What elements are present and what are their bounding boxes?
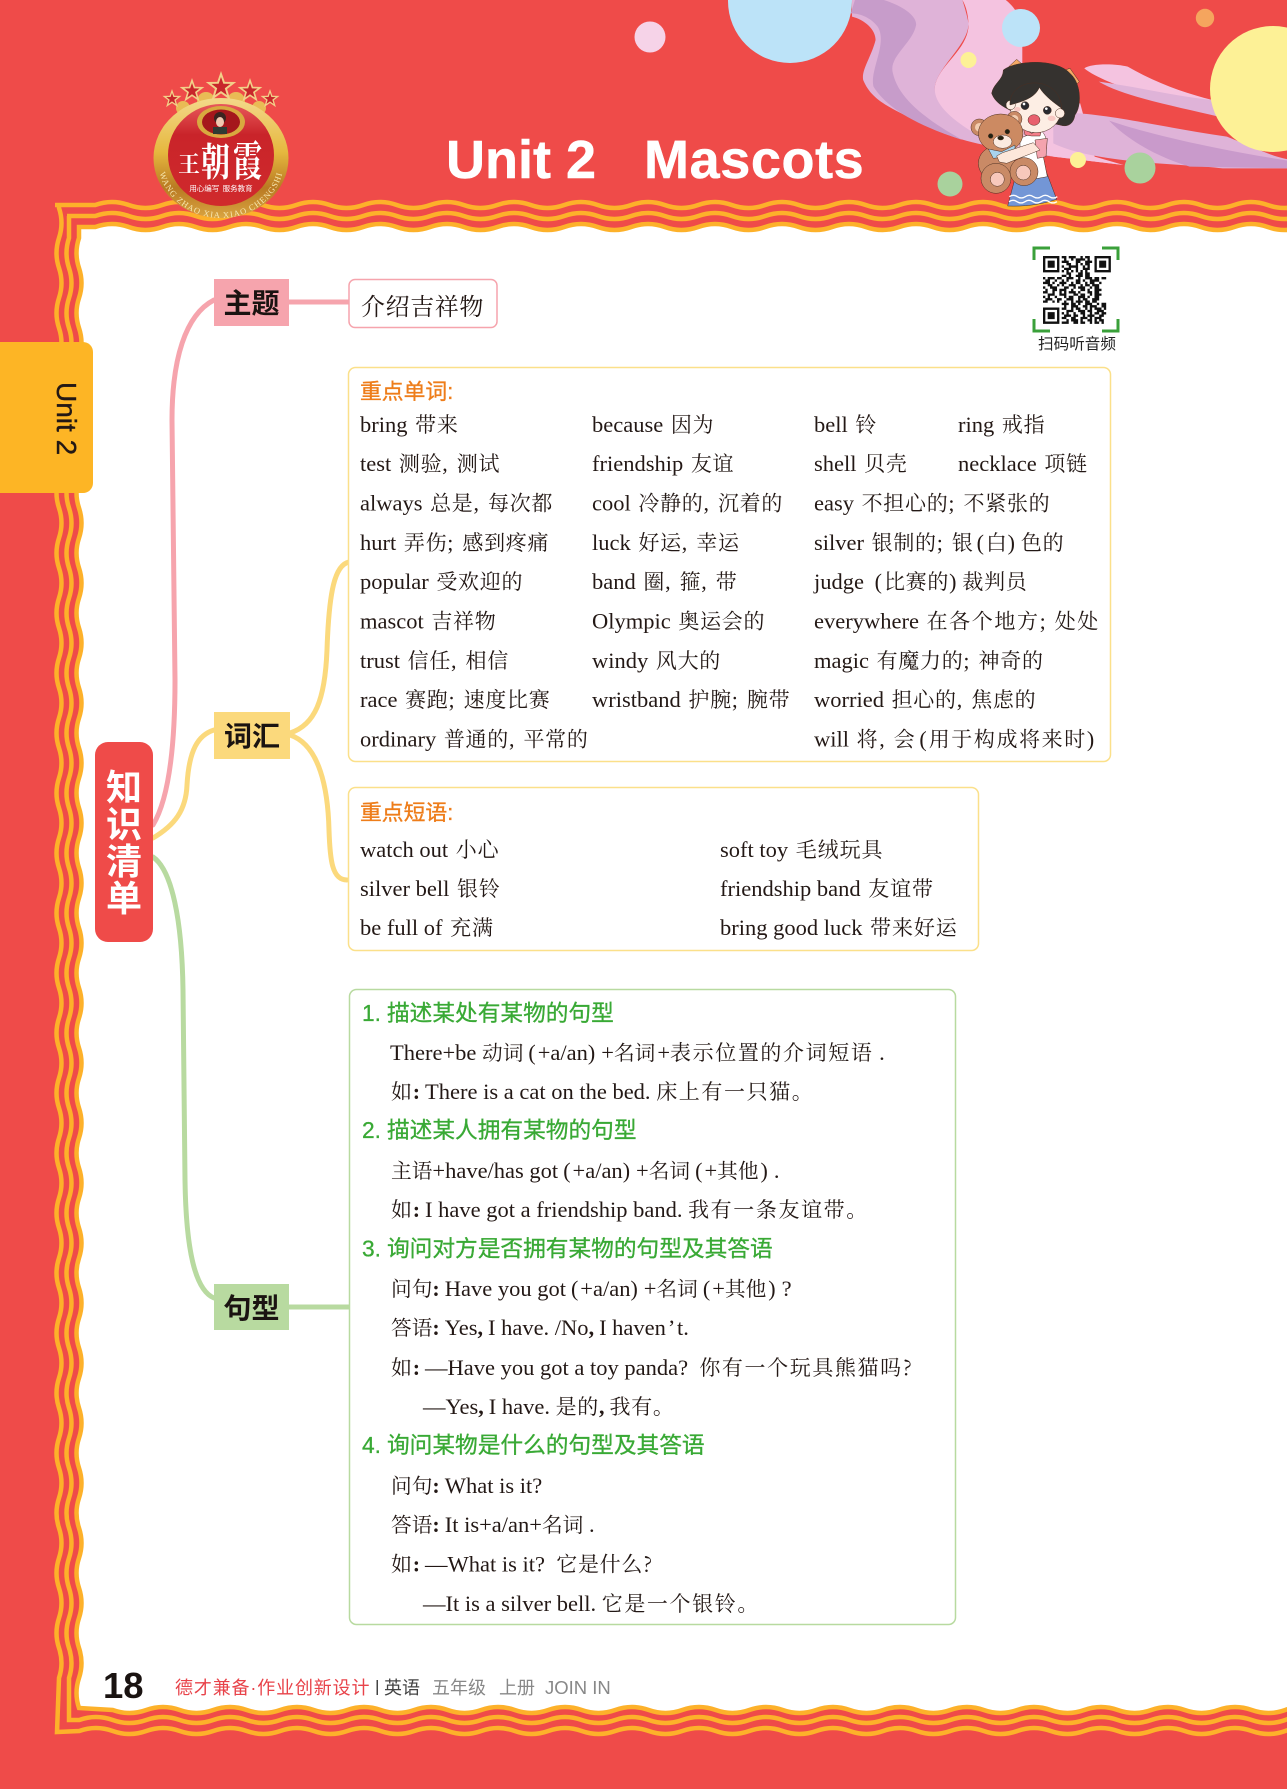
panel: key words: test 测验,测试 bbox=[360, 448, 500, 478]
branch node: 词汇: 词汇 bbox=[224, 721, 280, 752]
panel: sentence patterns: —Yes,I have. 是的,我有。 bbox=[422, 1391, 675, 1421]
panel: sentence patterns bbox=[350, 990, 956, 1624]
logo badge: 朝 bbox=[201, 131, 230, 187]
title bbox=[446, 130, 864, 190]
panel: key words: bell 铃 bbox=[814, 409, 877, 439]
QR code with scan corners bbox=[1034, 248, 1118, 354]
panel: sentence patterns: 描述某处有某物的句型 bbox=[387, 1000, 614, 1026]
panel: sentence patterns: There+be 动词(+a/an)+名词+表示位置的介词短语 . bbox=[390, 1036, 885, 1067]
panel: sentence patterns: 1. bbox=[362, 1000, 381, 1026]
panel: sentence patterns: —It is a silver bell. 它是一个银铃。 bbox=[422, 1588, 760, 1618]
logo badge: WANG ZHAO XIA XIAO CHENGSHI bbox=[160, 171, 282, 218]
footer text: JOIN IN bbox=[545, 1677, 611, 1698]
panel: key words: band 圈,箍,带 bbox=[592, 566, 737, 596]
title: Unit 2 bbox=[446, 130, 596, 190]
panel: sentence patterns: 如:I have got a friendship band. 我有一条友谊带。 bbox=[391, 1194, 869, 1224]
footer text: 英语 bbox=[384, 1678, 420, 1698]
panel: sentence patterns: 答语:Yes,I have. /No,I haven’t. bbox=[391, 1311, 689, 1341]
panel: sentence patterns: 询问对方是否拥有某物的句型及其答语 bbox=[387, 1236, 773, 1262]
illustration: girl hugging teddy bear bbox=[971, 59, 1079, 206]
central node: 知识清单: 单 bbox=[106, 870, 142, 922]
panel: sentence patterns: 如:There is a cat on the bed. 床上有一只猫。 bbox=[391, 1076, 814, 1106]
panel: key words: trust 信任,相信 bbox=[360, 645, 509, 675]
panel: key words: wristband 护腕;腕带 bbox=[592, 684, 790, 714]
panel: sentence patterns: 描述某人拥有某物的句型 bbox=[387, 1117, 637, 1143]
panel: sentence patterns: 问句:What is it? bbox=[391, 1469, 542, 1499]
panel: sentence patterns: 3. bbox=[362, 1236, 381, 1262]
branch node: 句型: 句型 bbox=[223, 1293, 280, 1324]
panel: key words: magic 有魔力的;神奇的 bbox=[814, 645, 1044, 675]
footer text bbox=[175, 1677, 611, 1698]
footer text: 德才兼备·作业创新设计 bbox=[175, 1678, 370, 1698]
panel: key words bbox=[348, 368, 1110, 762]
panel: sentence patterns: 如:—What is it? 它是什么? bbox=[391, 1548, 653, 1578]
branch node: 句型 bbox=[214, 1284, 289, 1330]
panel: key phrases: watch out 小心 bbox=[360, 834, 500, 864]
side tab: Unit 2 bbox=[0, 342, 93, 493]
branch node: 主题: 主题 bbox=[223, 288, 280, 319]
panel: key words: worried 担心的,焦虑的 bbox=[814, 684, 1036, 714]
branch node: 词汇 bbox=[214, 712, 290, 759]
panel: key words: Olympic 奥运会的 bbox=[592, 606, 765, 636]
panel: key phrases: silver bell 银铃 bbox=[360, 873, 501, 903]
panel: key words: bring 带来 bbox=[360, 409, 459, 439]
logo badge: 霞 bbox=[233, 128, 262, 189]
panel: key words: popular 受欢迎的 bbox=[360, 566, 523, 596]
panel: topic: 介绍吉祥物 bbox=[361, 287, 484, 322]
panel: key words: 重点单词: bbox=[360, 379, 453, 404]
panel: key words: windy 风大的 bbox=[592, 645, 721, 675]
panel: key phrases bbox=[348, 788, 978, 950]
panel: key words: because 因为 bbox=[592, 409, 714, 439]
panel: key words: always 总是,每次都 bbox=[360, 488, 553, 518]
footer text: 上册 bbox=[499, 1678, 535, 1698]
branch node: 主题 bbox=[214, 279, 289, 326]
panel: sentence patterns: 如:—Have you got a toy panda? 你有一个玩具熊猫吗? bbox=[391, 1352, 913, 1382]
panel: key words: friendship 友谊 bbox=[592, 448, 734, 478]
title: Mascots bbox=[644, 130, 864, 190]
panel: sentence patterns: 答语:It is+a/an+名词 . bbox=[391, 1508, 595, 1538]
panel: key words: judge (比赛的)裁判员 bbox=[813, 566, 1029, 596]
mind map connectors bbox=[153, 300, 349, 1307]
panel: key phrases: 重点短语: bbox=[360, 800, 453, 825]
panel: key words: shell 贝壳 bbox=[814, 448, 908, 478]
panel: key words: will 将,会(用于构成将来时) bbox=[814, 724, 1100, 754]
panel: sentence patterns: 4. bbox=[362, 1432, 381, 1458]
panel: key words: cool 冷静的,沉着的 bbox=[592, 488, 783, 518]
central node: 知识清单: 识 bbox=[106, 796, 142, 848]
panel: key words: luck 好运,幸运 bbox=[592, 527, 740, 557]
footer text: 五年级 bbox=[432, 1678, 486, 1698]
panel: sentence patterns: 2. bbox=[362, 1117, 381, 1143]
panel: key words: necklace 项链 bbox=[958, 448, 1088, 478]
panel: key words: silver 银制的;银(白)色的 bbox=[814, 527, 1064, 557]
side tab: Unit 2: Unit 2 bbox=[51, 382, 82, 455]
header decoration: ribbon and bubbles bbox=[634, 0, 1287, 196]
panel: topic bbox=[349, 280, 497, 328]
panel: key words: mascot 吉祥物 bbox=[360, 606, 496, 636]
logo badge: 用心编写 服务教育 bbox=[189, 183, 253, 194]
page number: 18 bbox=[103, 1665, 144, 1706]
panel: sentence patterns: 询问某物是什么的句型及其答语 bbox=[387, 1432, 705, 1458]
panel: key words: hurt 弄伤;感到疼痛 bbox=[360, 527, 549, 557]
central node: 知识清单: 知 bbox=[106, 759, 142, 811]
panel: sentence patterns: 问句:Have you got(+a/an)+名词(+其他)? bbox=[391, 1272, 792, 1302]
panel: key words: everywhere 在各个地方;处处 bbox=[814, 606, 1100, 636]
panel: key phrases: soft toy 毛绒玩具 bbox=[720, 834, 883, 864]
panel: key words: ordinary 普通的,平常的 bbox=[360, 724, 589, 754]
panel: key phrases: bring good luck 带来好运 bbox=[720, 912, 958, 942]
panel: key words: ring 戒指 bbox=[958, 409, 1045, 439]
logo badge bbox=[154, 71, 288, 218]
QR code with scan corners: 扫码听音频 bbox=[1038, 332, 1116, 354]
logo badge: 王 bbox=[178, 148, 200, 179]
central node: 知识清单 bbox=[95, 742, 153, 942]
panel: key words: easy 不担心的;不紧张的 bbox=[814, 488, 1050, 518]
central node: 知识清单: 清 bbox=[106, 833, 142, 885]
panel: key phrases: be full of 充满 bbox=[360, 912, 494, 942]
panel: sentence patterns: 主语+have/has got(+a/an)+名词(+其他). bbox=[391, 1154, 779, 1184]
panel: key phrases: friendship band 友谊带 bbox=[720, 873, 934, 903]
panel: key words: race 赛跑;速度比赛 bbox=[360, 684, 550, 714]
